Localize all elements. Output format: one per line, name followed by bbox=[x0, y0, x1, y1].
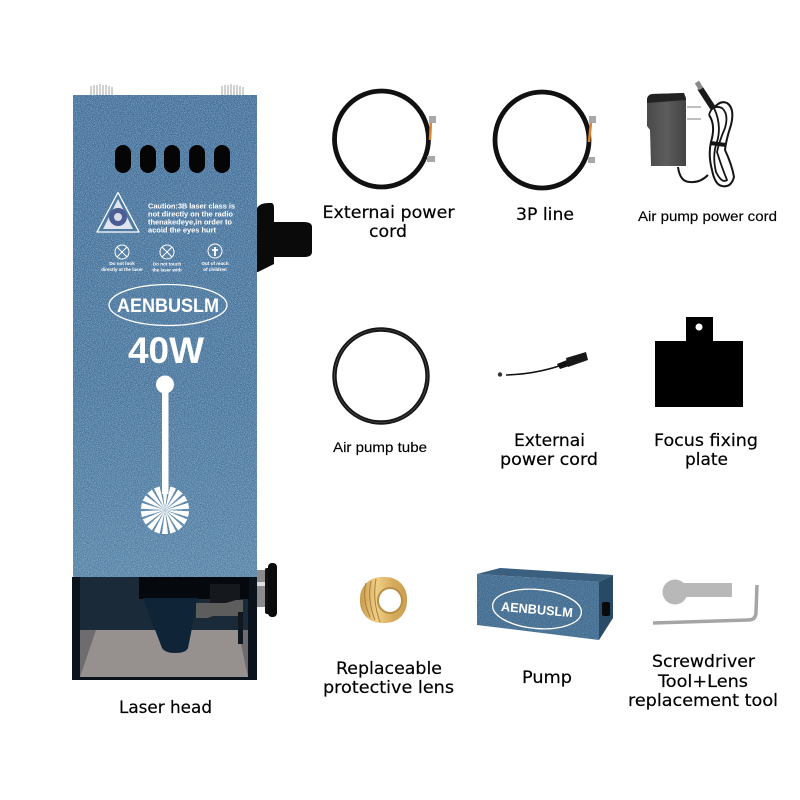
lower side knob bbox=[257, 563, 277, 617]
blue body bbox=[73, 95, 257, 577]
item: pump bbox=[477, 568, 613, 640]
label: external power cord 2: power cord bbox=[500, 450, 598, 470]
label: air pump power cord: Air pump power cord bbox=[638, 208, 777, 224]
logo bbox=[109, 284, 227, 326]
item: air pump power adapter bbox=[647, 82, 734, 186]
label: screwdriver tool and lens replacement tool: replacement tool bbox=[628, 691, 778, 711]
label: screwdriver tool and lens replacement tool: Tool+Lens bbox=[657, 672, 748, 692]
label: replaceable protective lens: protective lens bbox=[323, 678, 454, 698]
laser beam icon bbox=[141, 376, 189, 534]
item: pump: AENBUSLM bbox=[500, 599, 573, 620]
vent slots bbox=[115, 145, 230, 173]
label: air pump tube: Air pump tube bbox=[333, 439, 427, 455]
label: external power cord: cord bbox=[369, 222, 407, 242]
warning captions: of children bbox=[203, 267, 227, 272]
warning captions: Do not touch bbox=[153, 262, 181, 266]
label: screwdriver tool and lens replacement tool bbox=[628, 652, 778, 711]
label: laser head: Laser head bbox=[119, 698, 212, 718]
label: replaceable protective lens: Replaceable bbox=[336, 659, 442, 679]
caution text: Caution:3B laser class is bbox=[148, 202, 235, 210]
warning captions: directly at the laser bbox=[101, 267, 143, 272]
item: 3P line ring bbox=[495, 92, 596, 188]
item: lens tool and hex key bbox=[653, 580, 757, 623]
label: focus fixing plate: plate bbox=[685, 450, 728, 470]
label: external power cord 2 bbox=[500, 431, 598, 470]
icon: keep from children bbox=[208, 244, 222, 258]
label: replaceable protective lens bbox=[323, 659, 454, 698]
label: external power cord 2: Externai bbox=[514, 431, 585, 451]
label: focus fixing plate bbox=[654, 431, 758, 470]
label: screwdriver tool and lens replacement tool: Screwdriver bbox=[652, 652, 755, 672]
item: small external cord bbox=[498, 352, 588, 377]
label: focus fixing plate: Focus fixing bbox=[654, 431, 758, 451]
label: 3P line: 3P line bbox=[516, 205, 574, 225]
warning captions: Out of reach bbox=[201, 261, 229, 266]
label: external power cord: Externai power bbox=[322, 203, 455, 223]
power rating: 40W bbox=[128, 330, 204, 371]
icon: laser warning triangle bbox=[97, 192, 139, 232]
label: pump: Pump bbox=[522, 668, 572, 688]
item: air pump tube ring bbox=[334, 330, 428, 422]
icon: do not look bbox=[115, 245, 129, 259]
item: focus fixing plate bbox=[655, 317, 743, 407]
label: external power cord bbox=[322, 203, 455, 242]
transparent shield box bbox=[72, 577, 257, 680]
caution text: acoid the eyes hurt bbox=[148, 226, 216, 234]
item: external power cord ring bbox=[334, 91, 436, 187]
logo: AENBUSLM bbox=[117, 296, 219, 317]
caution text bbox=[148, 202, 235, 234]
item: protective lens bbox=[360, 577, 407, 623]
warning captions bbox=[101, 261, 229, 272]
caution text: thenakedeye,in order to bbox=[148, 218, 232, 226]
icon: do not touch bbox=[160, 245, 174, 259]
top screws bbox=[91, 84, 243, 95]
caution text: not directly on the radio bbox=[148, 210, 233, 218]
laser head bbox=[72, 84, 312, 680]
warning captions: the laser with bbox=[152, 268, 182, 272]
warning captions: Do not look bbox=[109, 261, 135, 266]
side air nozzle bbox=[257, 203, 312, 272]
